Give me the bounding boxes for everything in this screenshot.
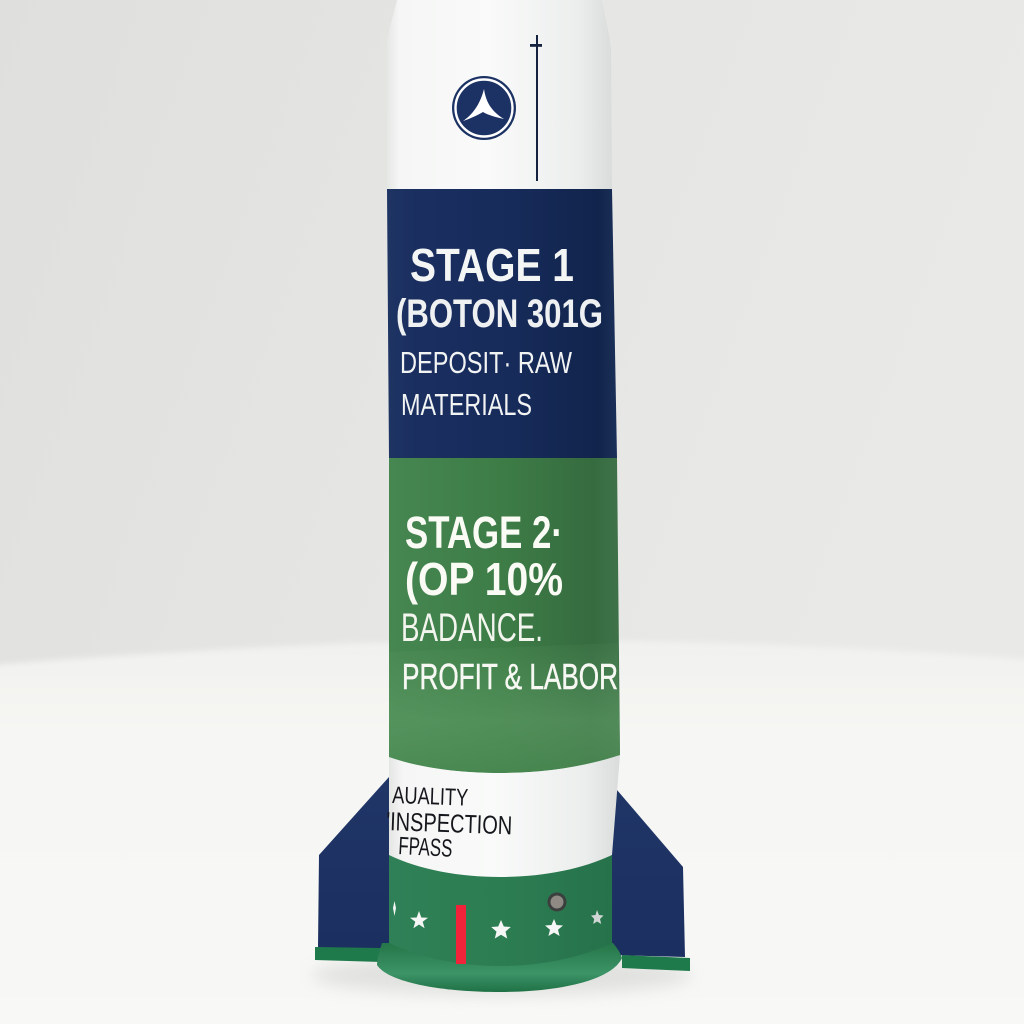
left fin xyxy=(315,777,390,962)
text: profit and labor: PROFIT & LABOR xyxy=(402,656,618,697)
flange base xyxy=(377,943,622,992)
text: fpass: FPASS xyxy=(398,832,453,863)
base shadow xyxy=(312,955,692,995)
rocket xyxy=(315,0,690,992)
panel: stage 1 xyxy=(387,189,617,458)
background wall xyxy=(0,0,1024,700)
text: inspection: 'INSPECTION xyxy=(386,806,513,840)
panel: green base xyxy=(389,855,612,966)
panel: white nose section xyxy=(386,0,612,190)
panel: stage 2 xyxy=(389,458,620,773)
heading: stage 1: STAGE 1 xyxy=(410,239,574,291)
subheading: cop 10%: (OP 10% xyxy=(405,553,563,605)
text: deposit raw: DEPOSIT· RAW xyxy=(400,345,573,380)
text: badance: BADANCE. xyxy=(401,606,543,650)
antenna line xyxy=(530,35,542,181)
panel: quality inspection xyxy=(386,755,620,877)
right fin xyxy=(611,783,690,971)
subheading: boton: (BOTON 301G xyxy=(396,292,603,336)
icon: circular logo xyxy=(452,76,516,140)
table surface xyxy=(0,640,1024,1024)
text: quality: AUALITY xyxy=(392,782,469,812)
stars xyxy=(393,901,604,938)
red bar xyxy=(456,905,466,964)
icon: button xyxy=(548,892,566,912)
text: materials: MATERIALS xyxy=(401,387,532,422)
heading: stage 2: STAGE 2· xyxy=(405,507,563,558)
